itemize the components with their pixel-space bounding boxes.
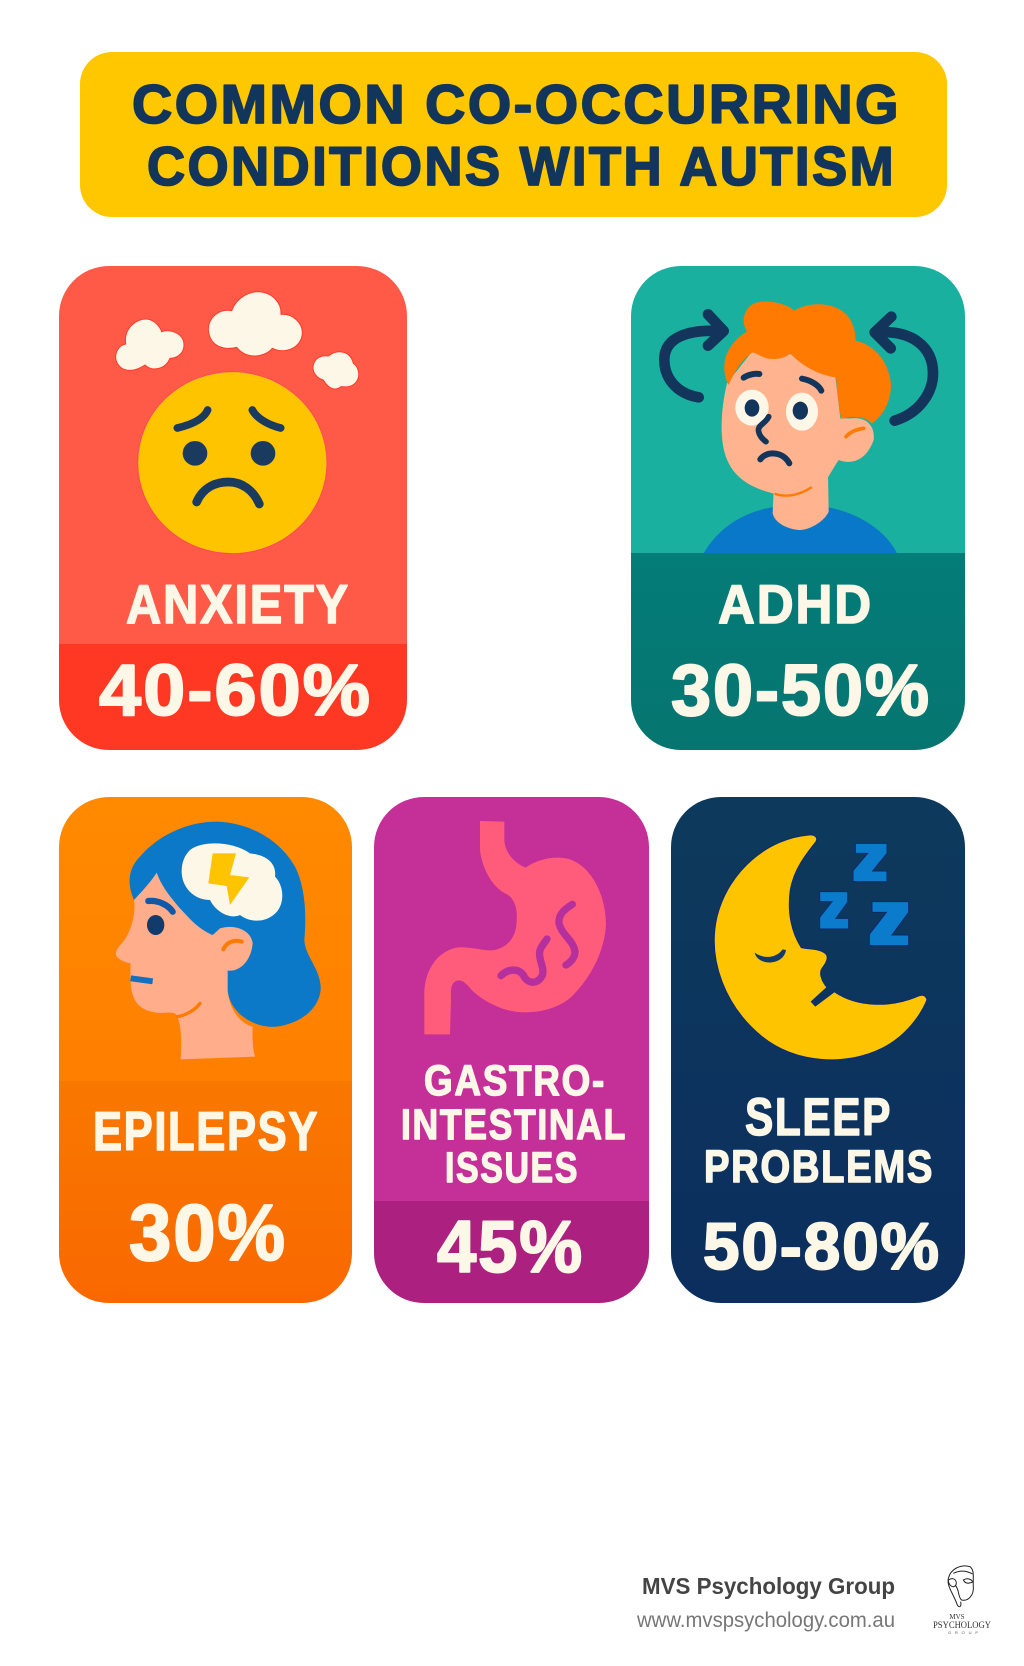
label: sleep problems: PROBLEMS [704,1141,934,1192]
value: 30-50%: 30-50% [671,651,931,731]
title banner [80,52,947,217]
value: 30%: 30% [129,1188,287,1277]
footer: organisation name: MVS Psychology Group [642,1573,895,1599]
icon: sleeping moon with Z letters [714,835,927,1060]
label: ADHD: ADHD [718,573,873,635]
logo: MVS Psychology Group: PSYCHOLOGY [933,1620,991,1630]
panel: gastro-intestinal issues [374,797,649,1303]
icon: worried face with clouds [116,292,359,554]
value: 45%: 45% [437,1207,584,1288]
label: gastro-intestinal issues [401,1057,627,1192]
logo: MVS Psychology Group: GROUP [948,1630,978,1635]
label: gastro-intestinal issues: ISSUES [445,1144,579,1192]
icon: stomach with worms [424,821,606,1034]
logo: MVS Psychology Group [933,1566,991,1635]
label: sleep problems [704,1088,934,1192]
label: anxiety: ANXIETY [126,573,350,635]
logo: MVS Psychology Group: MVS [949,1613,965,1621]
label: gastro-intestinal issues: GASTRO- [424,1057,606,1105]
panel: sleep problems [671,797,965,1303]
panel: anxiety [59,266,407,750]
panel: ADHD [631,266,965,750]
value: 50-80%: 50-80% [703,1209,941,1283]
value: 40-60%: 40-60% [99,651,372,731]
label: gastro-intestinal issues: INTESTINAL [401,1101,627,1149]
title [132,73,901,197]
title: COMMON CO-OCCURRING [132,73,901,135]
panel: epilepsy [59,797,352,1303]
label: epilepsy: EPILEPSY [93,1100,319,1162]
icon: distracted boy with arrows [664,302,933,553]
label: sleep problems: SLEEP [745,1088,892,1147]
footer: website: www.mvspsychology.com.au [636,1609,895,1632]
icon: head with brain lightning [116,822,321,1059]
title: CONDITIONS WITH AUTISM [147,135,896,197]
